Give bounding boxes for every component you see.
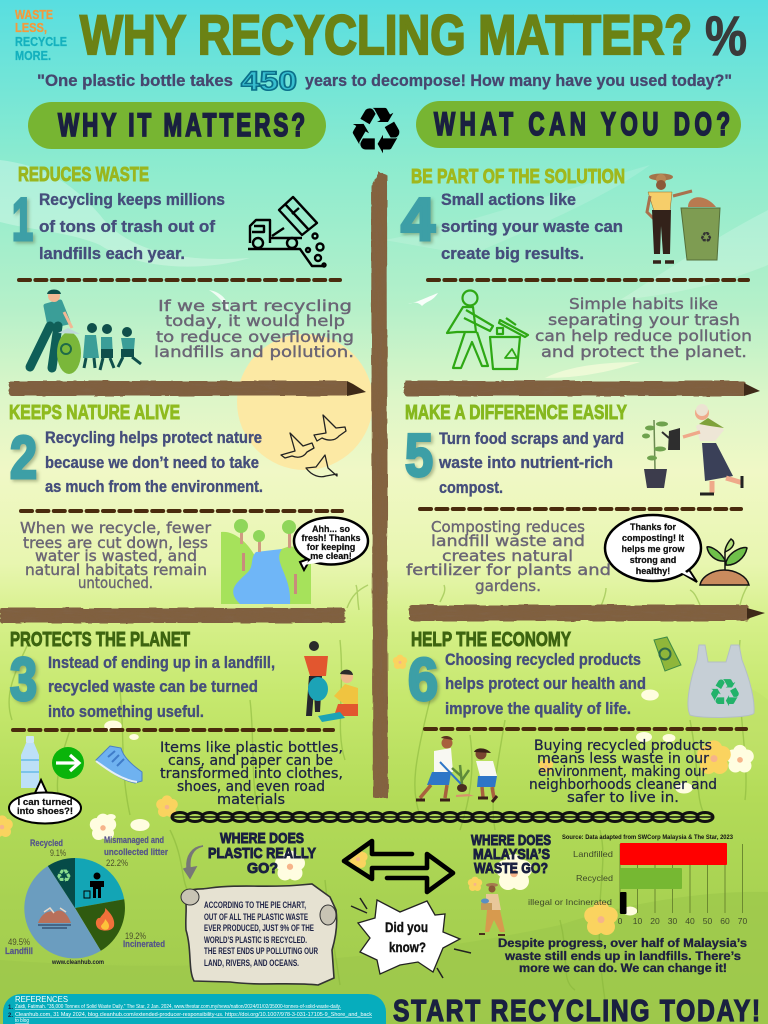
- number 3: 3: [10, 646, 37, 713]
- heading: PROTECTS THE PLANET: [10, 629, 190, 651]
- heading: where does plastic really go: [208, 830, 316, 877]
- reference list: Cleanhub.com, 31 May 2024, blog.cleanhub.com/extended-producer-responsibility-us. https://doi.org/10.1007/978-3-031-17105-9_Shore_and_back: [15, 1012, 373, 1018]
- icon: recycled plastic bag: ♻: [708, 671, 742, 715]
- panel: 5 make a difference easily: [405, 402, 749, 595]
- speech bubble: river: for keeping: [307, 542, 355, 552]
- text: callout: safer to live in.: [567, 790, 679, 806]
- body text: recycled waste can be turned: [48, 678, 258, 696]
- pie labels: www.cleanhub.com: [51, 960, 104, 966]
- bar chart: malaysia's waste: [528, 834, 747, 926]
- source: Source: Data adapted from SWCorp Malaysia & The Star, 2023: [562, 834, 733, 841]
- quote with 450 years: [37, 66, 732, 96]
- text: callout: trees are cut down, less: [23, 534, 208, 552]
- text: callout: separating your trash: [548, 311, 740, 329]
- text: despite progress: Despite progress, over half of Malaysia’s: [498, 938, 747, 950]
- axis numbers: 0: [618, 916, 623, 926]
- axis numbers: [618, 916, 747, 926]
- body text: landfills each year.: [39, 245, 185, 263]
- axis numbers: 30: [668, 916, 677, 926]
- icon: recycle in pie: ♻: [56, 866, 72, 887]
- heading: where does plastic really go: WHERE DOES: [220, 830, 304, 847]
- number 1: 1: [12, 186, 33, 253]
- body text: Recycling keeps millions: [39, 191, 225, 209]
- icon: bottle: [21, 736, 39, 788]
- heading: where does malaysia's waste go: [471, 833, 551, 877]
- text: callout: shoes, and even road: [177, 779, 325, 795]
- text: callout: Buying recycled products: [534, 738, 712, 754]
- body text: [441, 191, 623, 263]
- scroll text: THE REST ENDS UP POLLUTING OUR: [204, 946, 318, 956]
- scroll text: EVER PRODUCED, JUST 9% OF THE: [204, 923, 314, 933]
- icon: flame: [96, 908, 114, 931]
- category labels: Recycled: [576, 873, 613, 883]
- body text: into something useful.: [48, 703, 204, 721]
- pie labels: Recycled: [30, 838, 63, 848]
- reference list: 1.: [8, 1005, 13, 1011]
- text: callout: Simple habits like: [569, 295, 718, 313]
- illustration: river scene: [221, 519, 311, 604]
- icon: person at bin outline: [447, 290, 528, 369]
- category labels: illegal or Incinerated: [528, 897, 612, 907]
- text: callout: [154, 297, 354, 361]
- body text: [445, 651, 646, 718]
- illustration: people picking litter: [304, 641, 358, 722]
- reference list: 2.: [8, 1013, 13, 1019]
- pill heading: why it matters: WHY IT MATTERS?: [58, 107, 305, 143]
- scroll text: ACCORDING TO THE PIE CHART,: [204, 900, 306, 910]
- reference list: to blog: [15, 1018, 29, 1024]
- speech bubble: river: Ahh... so: [312, 524, 351, 534]
- axis numbers: 50: [703, 916, 712, 926]
- text: despite progress: waste still ends up in landfills. There’s: [504, 951, 741, 963]
- body text: of tons of trash out of: [39, 218, 216, 236]
- text: callout: fertilizer for plants and: [406, 561, 611, 579]
- axis numbers: 20: [650, 916, 660, 926]
- text: callout: untouched.: [78, 574, 153, 592]
- heading: BE PART OF THE SOLUTION: [411, 166, 625, 188]
- heading: HELP THE ECONOMY: [411, 629, 572, 651]
- scroll: plastic explanation: [181, 884, 337, 985]
- panel: 1 reduces waste: [12, 164, 354, 374]
- pill heading: what can you do: WHAT CAN YOU DO?: [434, 106, 730, 142]
- text: callout: If we start recycling: [158, 297, 352, 315]
- body text: waste into nutrient-rich: [438, 454, 613, 472]
- header tagline: MORE.: [15, 49, 51, 63]
- quote with 450 years: 450: [241, 66, 297, 96]
- text: callout: landfills and pollution.: [154, 343, 354, 361]
- pie labels: Landfill: [5, 946, 33, 956]
- text: callout: today, it would help: [165, 312, 345, 330]
- icon: landfill: [38, 908, 71, 928]
- illustration: farmer with green bin: [647, 174, 720, 262]
- number 4: 4: [401, 186, 436, 253]
- speech bubble: sprout: helps me grow: [621, 544, 686, 554]
- panel: 6 help the economy: [408, 629, 754, 806]
- text: callout: When we recycle, fewer: [20, 519, 212, 537]
- pill heading: why it matters: [28, 102, 326, 149]
- heading: KEEPS NATURE ALIVE: [9, 402, 180, 424]
- body text: Instead of ending up in a landfill,: [48, 654, 275, 672]
- recycle icon: ♻: [347, 95, 405, 169]
- heading: REDUCES WASTE: [18, 164, 149, 186]
- speech bubble: sprout: [605, 515, 701, 582]
- icon: dump truck: [248, 197, 326, 266]
- text: callout: can help reduce pollution: [535, 327, 752, 345]
- speech bubble: river: fresh! Thanks: [301, 533, 361, 543]
- panel: 2 keeps nature alive: [9, 402, 368, 604]
- chain divider: [172, 812, 714, 822]
- heading: where does plastic really go: PLASTIC REALLY: [208, 845, 316, 862]
- number 5: 5: [405, 422, 433, 489]
- text: callout: Items like plastic bottles,: [160, 740, 343, 756]
- speech bubble: bottle: I can turned: [18, 797, 72, 807]
- text: callout: environment, making our: [538, 764, 707, 780]
- body text: sorting your waste can: [441, 218, 623, 236]
- body text: [45, 429, 263, 496]
- pie chart: where plastic goes: [5, 835, 168, 966]
- text: callout: [535, 295, 752, 361]
- text: despite progress: [498, 938, 747, 975]
- pill heading: what can you do: [416, 101, 741, 148]
- body text: improve the quality of life.: [445, 700, 631, 718]
- body text: create big results.: [441, 245, 584, 263]
- number 2: 2: [10, 424, 37, 491]
- scroll text: OUT OF ALL THE PLASTIC WASTE: [204, 912, 308, 922]
- wooden post and logs: [0, 172, 765, 798]
- pie labels: 9.1%: [50, 848, 66, 859]
- category labels: Landfilled: [573, 849, 613, 859]
- speech bubble: river: me clean!: [310, 551, 352, 561]
- icon: three birds: [281, 415, 346, 477]
- speech bubble: river: [294, 518, 368, 570]
- pie labels: [5, 835, 168, 966]
- text: callout: landfill waste and: [431, 532, 585, 550]
- header tagline: [15, 8, 67, 63]
- scroll text: [204, 900, 318, 968]
- body text: Turn food scraps and yard: [439, 430, 624, 448]
- starburst: did you know: [351, 898, 471, 978]
- quote with 450 years: years to decompose! How many have you used today?": [305, 71, 732, 90]
- axis numbers: 40: [685, 916, 695, 926]
- speech bubble: sprout: composting! It: [622, 533, 684, 543]
- text: callout: Composting reduces: [431, 518, 585, 536]
- text: callout: [529, 738, 717, 806]
- icon: person with bin: [84, 872, 104, 898]
- icon: sprout: [700, 539, 749, 585]
- text: despite progress: more we can do. We can change it!: [519, 963, 727, 975]
- grid: [620, 844, 742, 913]
- pie labels: 22.2%: [106, 858, 128, 869]
- reference list: Zaidi, Fatimah. "35,000 Tonnes of Solid Waste Daily." The Star, 2 Jan. 2024, www.thestar.com.my/news/nation/2024/01/02/35000-tonnes-of-solid-waste-daily.: [15, 1004, 341, 1010]
- starburst: did you know: Did you: [385, 919, 428, 935]
- header tagline: LESS,: [15, 21, 47, 35]
- speech bubble: sprout: strong and: [630, 555, 676, 565]
- heading: where does malaysia's waste go: WASTE GO?: [474, 861, 548, 877]
- illustration: family recycling: [30, 290, 141, 374]
- reference list: [8, 1004, 373, 1024]
- body text: Small actions like: [441, 191, 576, 209]
- text: callout: and protect the planet.: [541, 343, 747, 361]
- arrow: gray curved: [184, 846, 203, 878]
- pie labels: 49.5%: [8, 937, 30, 948]
- double arrow: [344, 841, 453, 892]
- bars: [620, 843, 727, 914]
- icon: green arrow: [52, 747, 84, 779]
- text: callout: neighborhoods cleaner and: [529, 777, 717, 793]
- starburst: did you know: know?: [389, 939, 426, 955]
- text: callout: natural habitats remain: [25, 561, 207, 579]
- speech bubble: sprout: healthy!: [636, 566, 670, 576]
- text: callout: water is wasted, and: [35, 547, 197, 565]
- body text: Choosing recycled products: [445, 651, 641, 669]
- heading: MAKE A DIFFERENCE EASILY: [405, 402, 628, 424]
- text: callout: [406, 518, 611, 595]
- body text: Recycling helps protect nature: [45, 429, 262, 447]
- text: callout: gardens.: [475, 577, 541, 595]
- heading: where does plastic really go: GO?: [247, 860, 278, 877]
- category labels: [528, 849, 613, 907]
- axis numbers: 70: [738, 916, 747, 926]
- text: callout: transformed into clothes,: [160, 766, 343, 782]
- text: callout: materials: [217, 792, 285, 808]
- text: callout: creates natural: [442, 547, 573, 565]
- panel: 4 be part of the solution: [401, 166, 752, 369]
- body text: [438, 430, 624, 497]
- axis numbers: 60: [720, 916, 730, 926]
- heading: where does malaysia's waste go: WHERE DOES: [471, 833, 551, 849]
- text: callout: to reduce overflowing: [156, 328, 354, 346]
- scroll text: LAND, RIVERS, AND OCEANS.: [204, 958, 299, 968]
- speech bubble: bottle: [9, 780, 81, 824]
- text: callout: means less waste in our: [537, 751, 709, 767]
- scroll text: WORLD’S PLASTIC IS RECYCLED.: [204, 935, 307, 945]
- illustration: kids planting: [416, 736, 497, 802]
- body text: compost.: [439, 479, 503, 497]
- references panel: [3, 994, 386, 1024]
- pie labels: uncollected litter: [104, 847, 168, 857]
- illustration: farmer with basket: [479, 883, 505, 935]
- number 6: 6: [408, 646, 438, 713]
- percent symbol: %: [705, 4, 747, 67]
- quote with 450 years: "One plastic bottle takes: [37, 71, 233, 90]
- body text: because we don’t need to take: [45, 454, 259, 472]
- icon: recycled tag: [654, 637, 681, 671]
- pie labels: Mismanaged and: [104, 835, 164, 845]
- illustration: farmer with green bin: ♻: [700, 230, 712, 246]
- body text: as much from the environment.: [45, 478, 263, 496]
- references heading: REFERENCES: [15, 995, 68, 1004]
- heading: where does malaysia's waste go: MALAYSIA’S: [473, 847, 550, 863]
- text: callout: [20, 519, 212, 592]
- body text: [39, 191, 225, 263]
- body text: [48, 654, 275, 721]
- speech bubble: sprout: Thanks for: [630, 522, 676, 532]
- pie labels: Incinerated: [123, 939, 165, 949]
- icon: blue shoe: [96, 746, 142, 783]
- text: callout: cans, and paper can be: [168, 753, 333, 769]
- header tagline: RECYCLE: [15, 35, 67, 49]
- icon: recycled plastic bag: [688, 645, 754, 717]
- speech bubble: bottle: into shoes?!: [17, 806, 73, 816]
- illustration: woman watering plant: [642, 404, 743, 494]
- panel: 3 protects the planet: [9, 629, 358, 824]
- text: callout: [160, 740, 343, 808]
- header tagline: WASTE: [15, 8, 53, 22]
- body text: helps protect our health and: [445, 675, 646, 693]
- pie labels: 19.2%: [125, 931, 146, 942]
- axis numbers: 10: [633, 916, 642, 926]
